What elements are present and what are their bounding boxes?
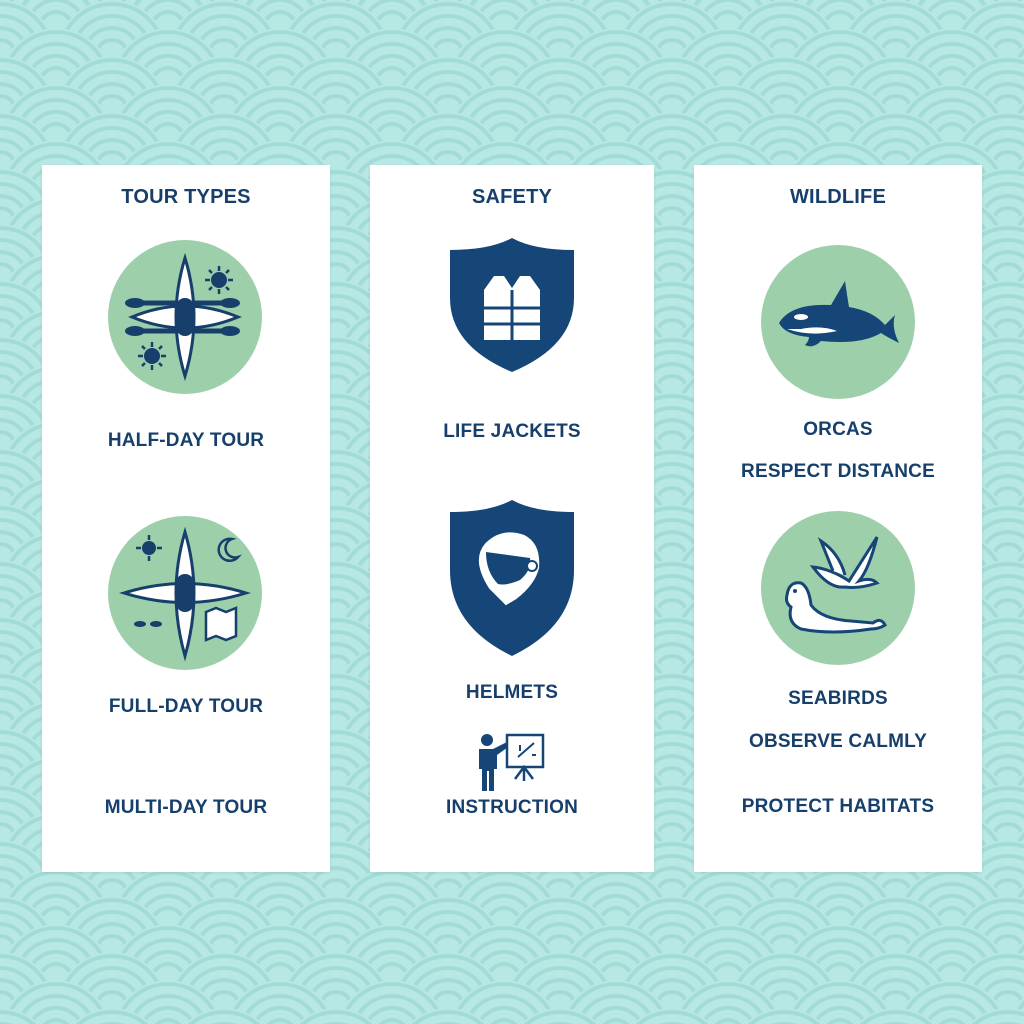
icon: full-day kayak xyxy=(108,516,262,670)
icon: shield life jacket xyxy=(450,238,574,372)
label: orcas: ORCAS xyxy=(803,419,873,440)
panel: wildlife xyxy=(694,165,982,872)
label: respect distance: RESPECT DISTANCE xyxy=(741,461,935,482)
label: multi-day: MULTI-DAY TOUR xyxy=(105,797,267,818)
icon: orca xyxy=(761,245,915,399)
label: seabirds: SEABIRDS xyxy=(788,688,888,709)
panel: tour types xyxy=(42,165,330,872)
icon: instruction xyxy=(479,734,544,791)
icon: seal and seabird xyxy=(761,511,915,665)
icon: shield helmet xyxy=(450,500,574,656)
heading: tour types: TOUR TYPES xyxy=(121,186,251,208)
label: instruction: INSTRUCTION xyxy=(446,797,578,818)
label: observe calmly: OBSERVE CALMLY xyxy=(749,731,927,752)
label: half-day: HALF-DAY TOUR xyxy=(108,430,264,451)
label: life jackets: LIFE JACKETS xyxy=(443,421,581,442)
panel: safety xyxy=(370,165,654,872)
label: helmets: HELMETS xyxy=(466,682,558,703)
label: protect habitats: PROTECT HABITATS xyxy=(742,796,934,817)
heading: safety: SAFETY xyxy=(472,186,552,208)
icon: half-day kayak xyxy=(108,240,262,394)
label: full-day: FULL-DAY TOUR xyxy=(109,696,263,717)
heading: wildlife: WILDLIFE xyxy=(790,186,886,208)
